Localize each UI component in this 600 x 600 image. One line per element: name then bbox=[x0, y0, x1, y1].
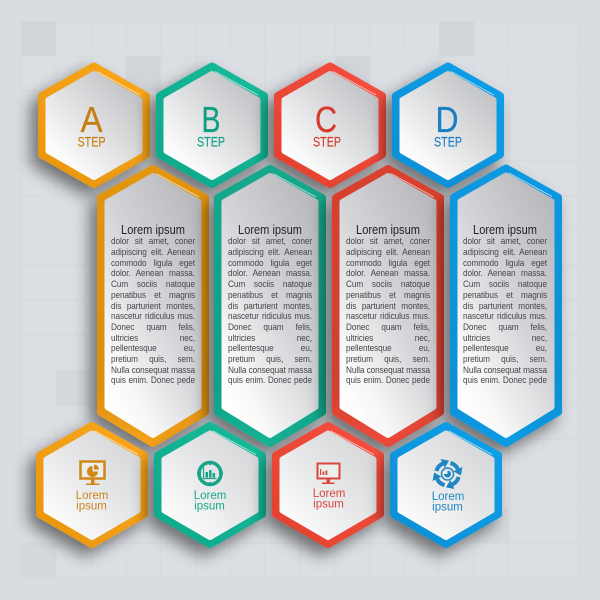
bottom hexagon D bbox=[394, 426, 498, 544]
text block: panel B: Nulla consequat massa bbox=[228, 365, 312, 375]
text block: panel C: commodo ligula eget bbox=[346, 258, 430, 268]
text block: panel A: quis enim. Donec pede bbox=[111, 375, 195, 385]
label: Lorem ipsum: ipsum bbox=[313, 498, 344, 510]
icon: circular arrows bbox=[433, 459, 462, 489]
text block: panel D: penatibus et magnis bbox=[463, 290, 547, 300]
text block: panel A: Nulla consequat massa bbox=[111, 365, 195, 375]
step hexagon C: C bbox=[315, 99, 337, 140]
text block: panel D: dis parturient montes, bbox=[463, 300, 547, 310]
label: Lorem ipsum: Lorem bbox=[76, 490, 108, 502]
bottom hexagon C bbox=[276, 426, 380, 544]
text block: panel B bbox=[228, 223, 312, 385]
text block: panel B: pellentesque eu, bbox=[228, 343, 312, 353]
text block: panel A: dis parturient montes, bbox=[111, 300, 195, 310]
step hexagon C: STEP bbox=[313, 134, 341, 150]
text block: panel C: ultricies nec, bbox=[346, 333, 430, 343]
text block: panel D: quis enim. Donec pede bbox=[463, 375, 547, 385]
text block: panel B: pretium quis, sem. bbox=[228, 354, 312, 364]
text block: panel C: dolor. Aenean massa. bbox=[346, 268, 430, 278]
text block: panel C: Cum sociis natoque bbox=[346, 279, 430, 289]
step hexagon D: STEP bbox=[434, 134, 462, 150]
icon: monitor with bars bbox=[318, 464, 340, 484]
label: Lorem ipsum: Lorem bbox=[313, 488, 345, 500]
text block: panel D: Lorem ipsum bbox=[473, 223, 537, 237]
text block: panel D: Nulla consequat massa bbox=[463, 365, 547, 375]
text block: panel C: Nulla consequat massa bbox=[346, 365, 430, 375]
step hexagon A bbox=[42, 66, 146, 184]
text block: panel B: nascetur ridiculus mus. bbox=[228, 311, 312, 321]
text block: panel C: dolor sit amet, coner bbox=[346, 236, 430, 246]
text block: panel D bbox=[463, 223, 548, 385]
text block: panel A: dolor. Aenean massa. bbox=[111, 268, 195, 278]
text block: panel B: dis parturient montes, bbox=[228, 300, 312, 310]
text block: panel B: dolor. Aenean massa. bbox=[228, 268, 312, 278]
text block: panel C bbox=[346, 223, 430, 385]
text block: panel B: ultricies nec, bbox=[228, 333, 312, 343]
text block: panel A: nascetur ridiculus mus. bbox=[111, 311, 195, 321]
text block: panel A: pretium quis, sem. bbox=[111, 354, 195, 364]
text block: panel C: Donec quam felis, bbox=[346, 322, 430, 332]
tall panel shape D bbox=[454, 168, 558, 443]
tall panel shape B bbox=[218, 169, 322, 443]
text block: panel B: Donec quam felis, bbox=[228, 322, 312, 332]
text block: panel A: pellentesque eu, bbox=[111, 343, 195, 353]
text block: panel C: pellentesque eu, bbox=[346, 343, 430, 353]
text block: panel A: Cum sociis natoque bbox=[111, 279, 195, 289]
text block: panel A: Donec quam felis, bbox=[111, 322, 195, 332]
text block: panel D: pretium quis, sem. bbox=[463, 354, 547, 364]
text block: panel A: penatibus et magnis bbox=[111, 290, 195, 300]
text block: panel C: nascetur ridiculus mus. bbox=[346, 311, 430, 321]
step hexagon A: A bbox=[80, 99, 102, 140]
step hexagon D: D bbox=[436, 99, 458, 140]
text block: panel D: dolor. Aenean massa. bbox=[463, 268, 547, 278]
text block: panel B: Cum sociis natoque bbox=[228, 279, 312, 289]
tall panel shape A bbox=[101, 169, 205, 443]
tall panel shape C bbox=[336, 169, 440, 443]
text block: panel B: quis enim. Donec pede bbox=[228, 375, 312, 385]
step hexagon C bbox=[278, 66, 382, 184]
text block: panel A: commodo ligula eget bbox=[111, 258, 195, 268]
step hexagon B bbox=[160, 66, 264, 184]
text block: panel D: Donec quam felis, bbox=[463, 322, 547, 332]
text block: panel A: adipiscing elit. Aenean bbox=[111, 247, 195, 257]
step hexagon B: STEP bbox=[197, 134, 225, 150]
text block: panel B: Lorem ipsum bbox=[238, 223, 302, 237]
label: Lorem ipsum: ipsum bbox=[194, 500, 225, 512]
icon: circular bar chart bbox=[197, 461, 223, 486]
text block: panel A bbox=[111, 223, 196, 385]
text block: panel D: Cum sociis natoque bbox=[463, 279, 547, 289]
text block: panel D: nascetur ridiculus mus. bbox=[463, 311, 547, 321]
icon: monitor with pie chart bbox=[80, 462, 104, 485]
text block: panel B: dolor sit amet, coner bbox=[228, 236, 312, 246]
text block: panel D: pellentesque eu, bbox=[463, 343, 547, 353]
label: Lorem ipsum: ipsum bbox=[76, 500, 107, 512]
text block: panel C: dis parturient montes, bbox=[346, 300, 430, 310]
step hexagon D bbox=[396, 66, 500, 184]
text block: panel A: dolor sit amet, coner bbox=[111, 236, 195, 246]
text block: panel A: ultricies nec, bbox=[111, 333, 195, 343]
text block: panel C: quis enim. Donec pede bbox=[346, 375, 430, 385]
step hexagon B: B bbox=[202, 99, 220, 140]
step hexagon A: STEP bbox=[78, 134, 106, 150]
text block: panel B: adipiscing elit. Aenean bbox=[228, 247, 312, 257]
text block: panel C: penatibus et magnis bbox=[346, 290, 430, 300]
text block: panel B: commodo ligula eget bbox=[228, 258, 312, 268]
text block: panel C: pretium quis, sem. bbox=[346, 354, 430, 364]
text block: panel D: dolor sit amet, coner bbox=[463, 236, 547, 246]
text block: panel D: ultricies nec, bbox=[463, 333, 547, 343]
text block: panel C: adipiscing elit. Aenean bbox=[346, 247, 430, 257]
text block: panel C: Lorem ipsum bbox=[356, 223, 420, 237]
label: Lorem ipsum: Lorem bbox=[432, 491, 464, 503]
label: Lorem ipsum: ipsum bbox=[432, 502, 463, 514]
bottom hexagon B bbox=[158, 426, 262, 544]
label: Lorem ipsum: Lorem bbox=[194, 490, 226, 502]
bottom hexagon A bbox=[40, 426, 144, 544]
text block: panel D: commodo ligula eget bbox=[463, 258, 547, 268]
text block: panel A: Lorem ipsum bbox=[121, 223, 185, 237]
text block: panel B: penatibus et magnis bbox=[228, 290, 312, 300]
text block: panel D: adipiscing elit. Aenean bbox=[463, 247, 547, 257]
